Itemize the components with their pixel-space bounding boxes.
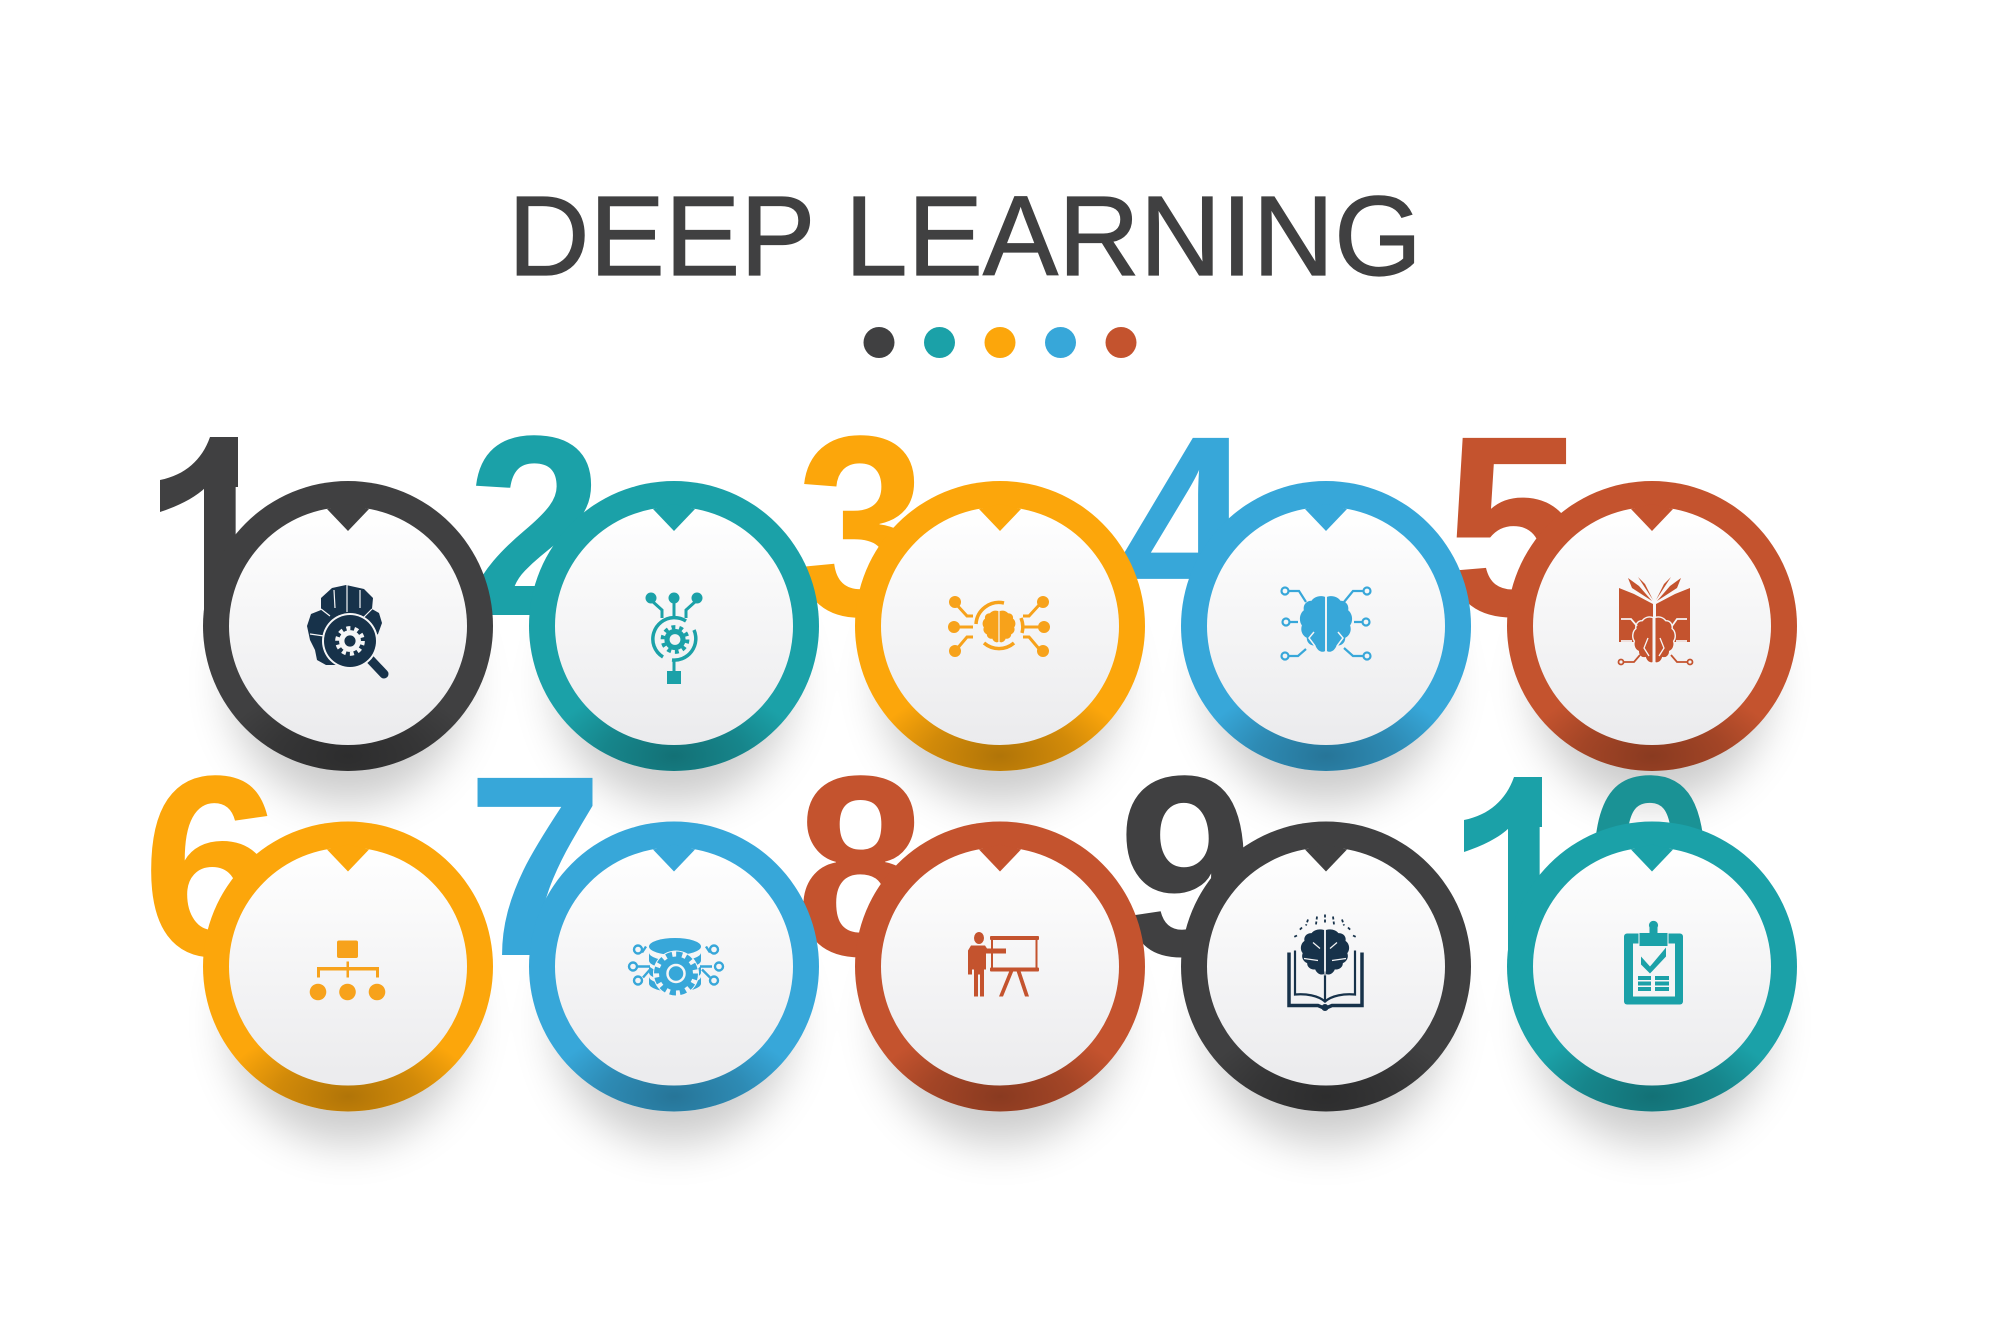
icon: presenter at board [968,932,1039,996]
icon: hierarchy [310,940,385,1000]
colour dots [864,327,1136,358]
panel: item 6 [203,822,493,1112]
icon: database with gear and circuit [629,938,723,996]
icon: book and brain [1618,577,1692,664]
panel: item 1 [203,481,493,771]
panel: item 8 [855,822,1145,1112]
number 9: 9 [1118,723,1253,1011]
number 1 [160,437,238,609]
number 10: 0 [1585,722,1714,1010]
number 4: 4 [1121,383,1252,670]
drop shadows [230,560,1770,1144]
icon: checklist clipboard [1624,920,1683,1004]
icon: circuit brain [1282,588,1370,660]
panel: item 9 [1181,822,1471,1112]
number 6: 6 [142,722,281,1010]
number 10: 1 [1447,722,1586,1010]
panel: item 5 [1507,481,1797,771]
icon: brain with circuit nodes [948,596,1050,657]
number 3: 3 [796,383,927,670]
number 2: 2 [466,382,604,670]
panel: item 7 [529,822,819,1112]
number 1: 1 [143,382,282,670]
number 5: 5 [1444,382,1583,670]
numbers [142,382,1714,1011]
number 8: 8 [796,722,925,1010]
icon: brain with magnifier and gear [307,585,384,674]
number 7: 7 [467,722,603,1010]
title: DEEP LEARNING [508,173,1422,299]
panel: item 2 [529,481,819,771]
number 10 [1464,775,1702,950]
panel: item 4 [1181,481,1471,771]
icon: gear with connected nodes [646,592,702,684]
icon: brain over open book [1289,914,1362,1011]
panel: item 3 [855,481,1145,771]
panel: item 10 [1507,822,1797,1112]
